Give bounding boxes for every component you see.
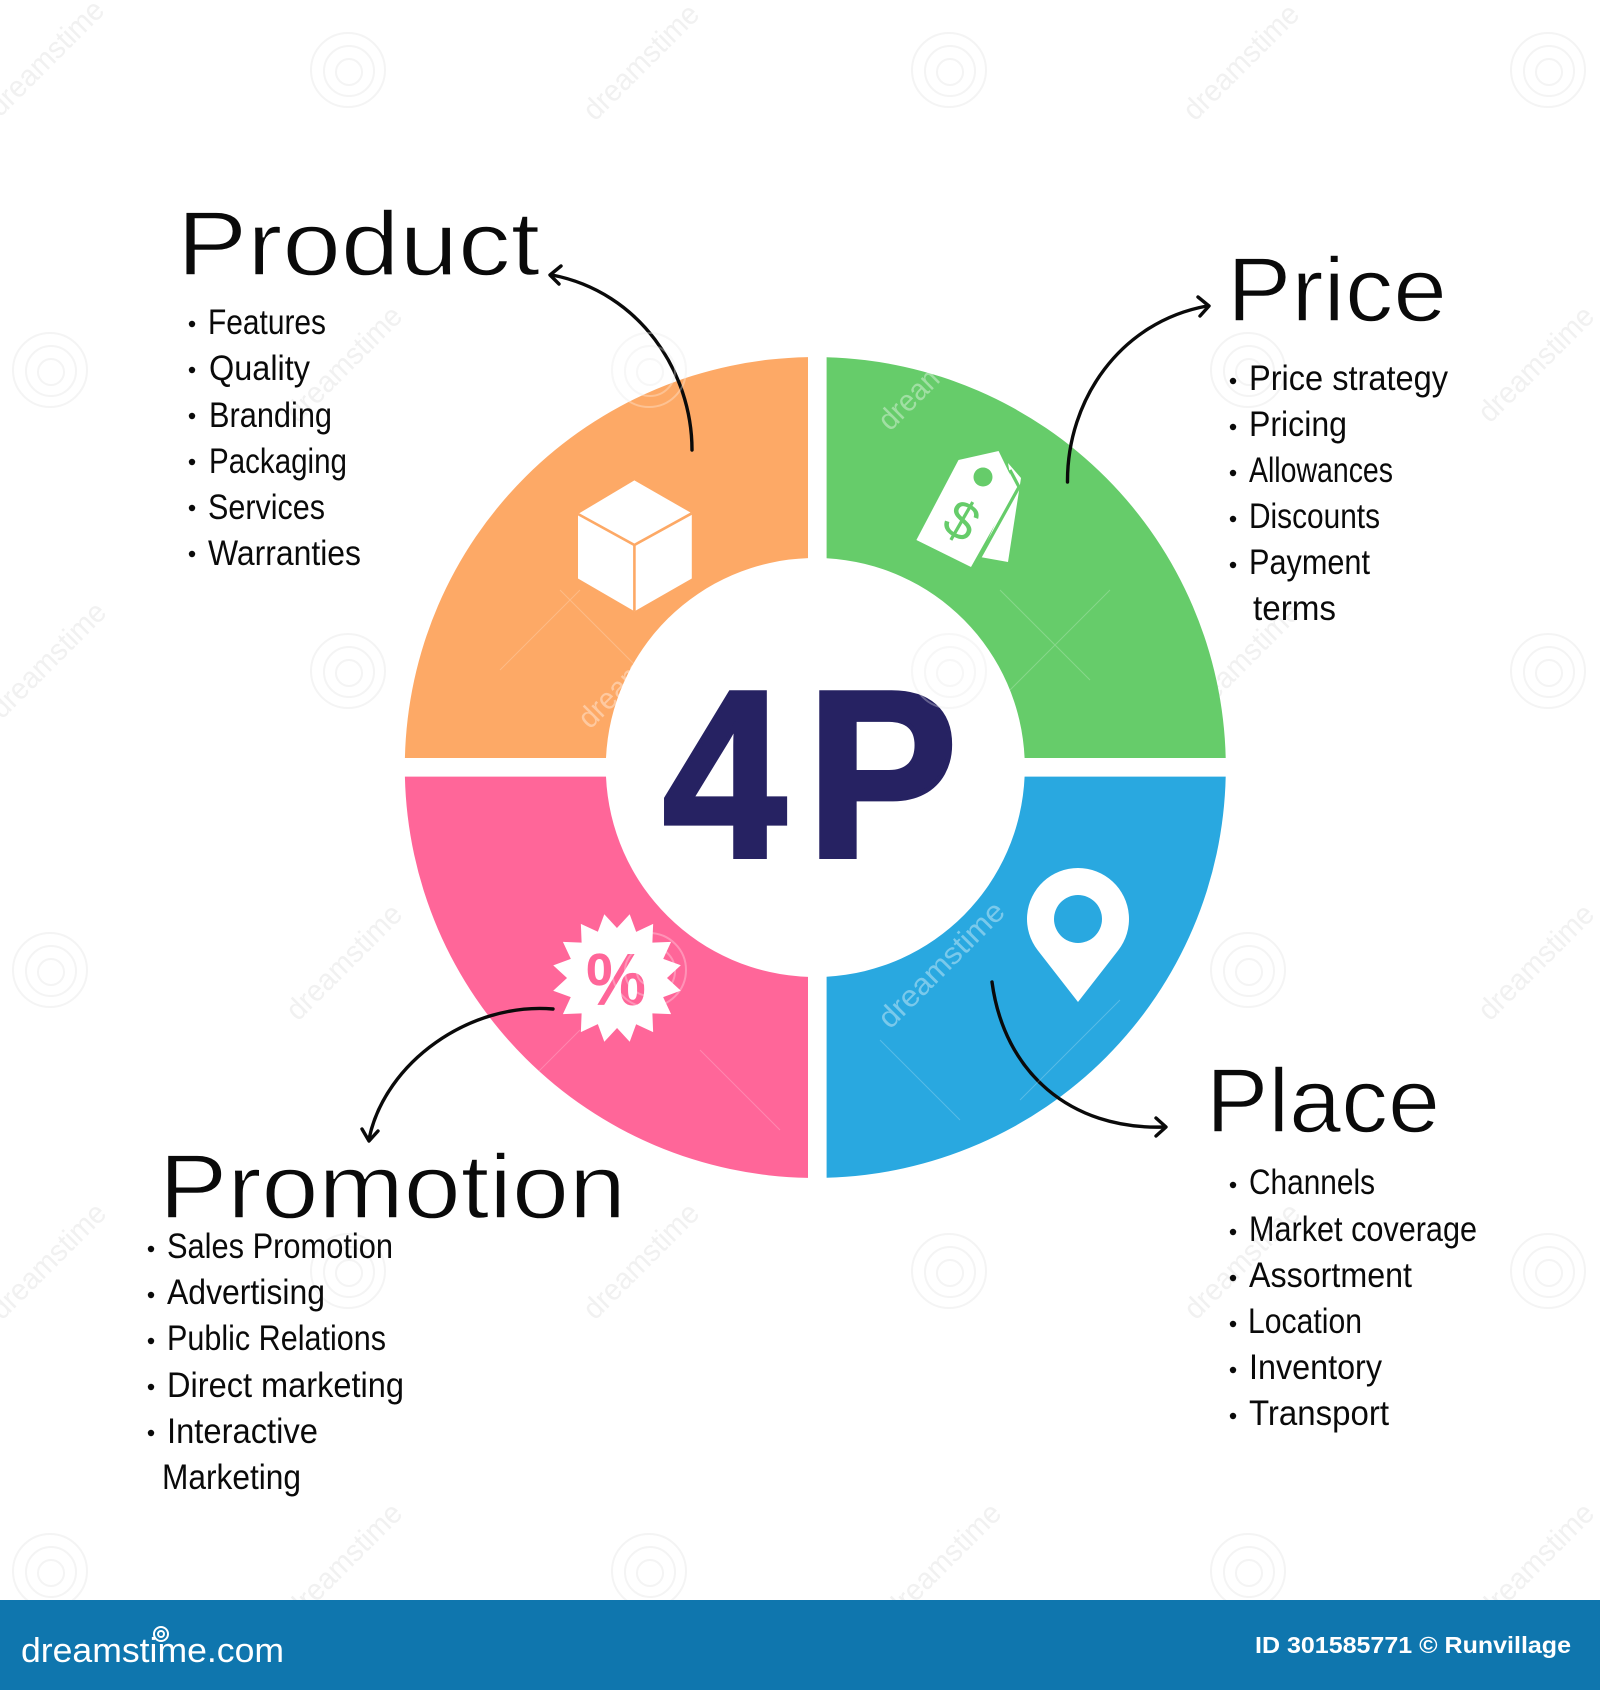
list: place items: Location [1248, 1302, 1362, 1341]
list: place items: Market coverage [1249, 1210, 1477, 1249]
list: promotion items: Sales Promotion [167, 1227, 393, 1266]
arrow: place [992, 982, 1166, 1136]
list: place items: Transport [1249, 1394, 1389, 1433]
logo: dreamstime.com: dreamstime.com [21, 1632, 284, 1670]
text: dreamstime [280, 1497, 409, 1626]
icon: cube [578, 480, 692, 611]
icon: price tag [916, 451, 1021, 568]
list: promotion items: Interactive [167, 1412, 318, 1451]
heading: Place: Place [1206, 1051, 1440, 1152]
segment: price green quadrant [827, 357, 1226, 758]
icon: percent badge: % [586, 938, 646, 1021]
icon: price tag: $ [934, 487, 990, 554]
list: price items [1230, 359, 1448, 628]
list: price items: Price strategy [1249, 359, 1448, 398]
credit: image id: ID 301585771 © Runvillage [1255, 1632, 1571, 1658]
list: product items: Packaging [209, 442, 347, 481]
list: product items: Features [208, 303, 326, 342]
panel: place [827, 777, 1477, 1433]
heading: Price: Price [1227, 240, 1447, 341]
text: dreamstime [872, 308, 1001, 437]
list: promotion items: Direct marketing [167, 1366, 404, 1405]
list: price items: Discounts [1249, 497, 1380, 536]
text: dreamstime [577, 1197, 706, 1326]
text: dreamstime [280, 300, 409, 429]
list: product items: Services [208, 488, 325, 527]
panel: promotion [148, 777, 808, 1497]
list: place items: Inventory [1249, 1348, 1382, 1387]
list: promotion items: Public Relations [167, 1319, 386, 1358]
list: place items: Assortment [1249, 1256, 1412, 1295]
arrow: price [1067, 297, 1209, 482]
text: dreamstime [572, 606, 701, 735]
list: promotion items [148, 1227, 404, 1497]
list: price items: Allowances [1249, 451, 1393, 490]
arrow: product [550, 266, 692, 450]
text: dreamstime [1178, 596, 1307, 725]
segment: promotion pink quadrant [405, 777, 808, 1178]
icon: logo spiral [154, 1627, 168, 1641]
list: place items [1230, 1163, 1477, 1433]
list: promotion items: Advertising [167, 1273, 325, 1312]
footer banner [0, 1600, 1600, 1690]
list: price items: Pricing [1249, 405, 1347, 444]
heading: Promotion: Promotion [159, 1137, 626, 1238]
icon: percent badge [541, 902, 693, 1054]
segment: place blue quadrant [827, 777, 1226, 1178]
list: price items: Payment [1249, 543, 1370, 582]
text: dreamstime [879, 1497, 1008, 1626]
heading: Product: Product [177, 194, 540, 295]
segment: product orange quadrant [405, 357, 808, 758]
list: promotion items: Marketing [162, 1458, 301, 1497]
list: product items: Warranties [208, 534, 361, 573]
text: dreamstime [1178, 1197, 1307, 1326]
panel: product [177, 194, 808, 758]
icon: location pin [1027, 868, 1129, 1002]
center title: 4P: P [806, 642, 958, 908]
list: product items: Quality [209, 349, 310, 388]
list: place items: Channels [1249, 1163, 1375, 1202]
center title: 4P: 4 [663, 642, 786, 908]
text: dreamstime [280, 898, 409, 1027]
list: price items: terms [1253, 589, 1336, 628]
list: product items [189, 303, 361, 573]
center title: 4P [663, 642, 958, 908]
arrow: promotion [362, 1008, 553, 1141]
panel: price [827, 240, 1448, 758]
text: dreamstime [872, 895, 1012, 1035]
list: product items: Branding [209, 396, 332, 435]
